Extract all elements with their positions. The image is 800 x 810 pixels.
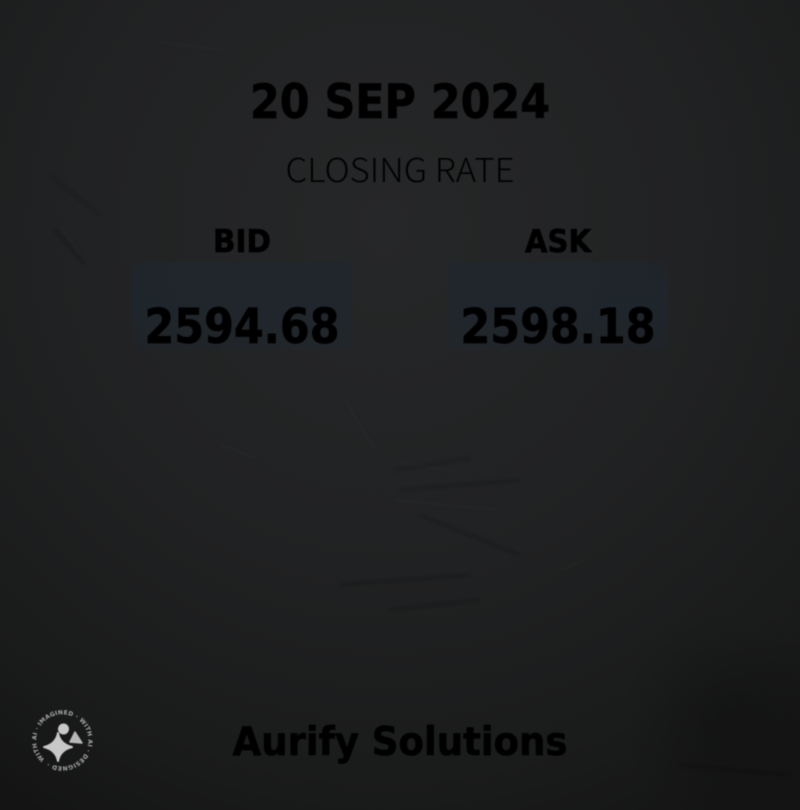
bid value: 2594.68	[144, 299, 340, 355]
bid value box	[132, 262, 352, 350]
subheading: closing rate: CLOSING RATE	[286, 144, 514, 192]
bid label: BID	[213, 224, 271, 260]
heading: date: 20 SEP 2024	[250, 75, 550, 130]
icon: imagined with AI badge: WITH AI · IMAGINED · WITH AI · DESIGNED ·	[32, 709, 94, 772]
panel: ask	[448, 224, 668, 355]
panel: bid	[132, 224, 352, 355]
brand name: Aurify Solutions	[232, 720, 568, 765]
ask value: 2598.18	[460, 299, 656, 355]
ask label: ASK	[525, 224, 592, 260]
ask value box	[448, 262, 668, 350]
